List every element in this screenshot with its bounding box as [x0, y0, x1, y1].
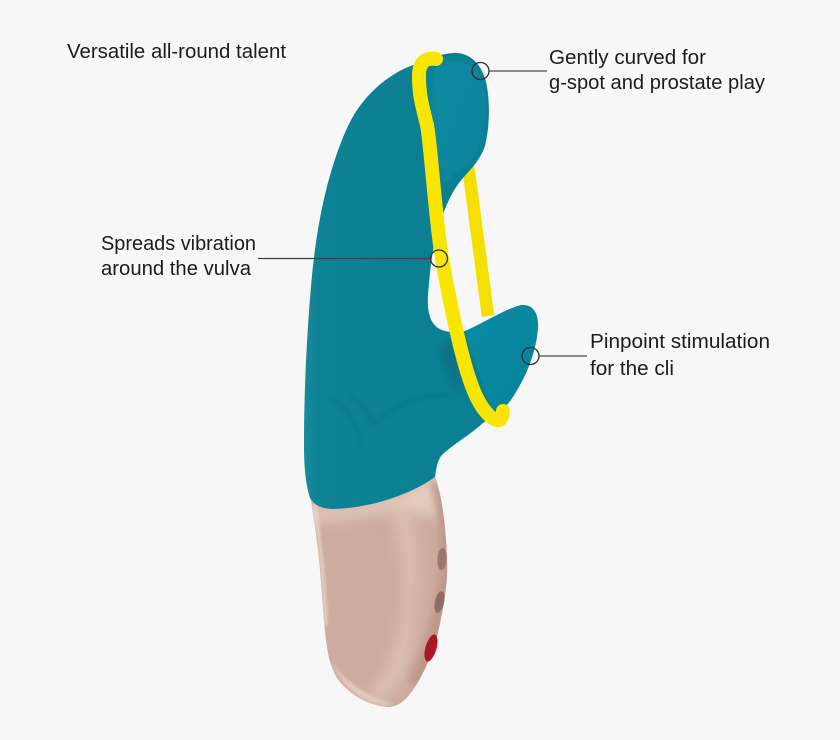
yellow ring front strand [419, 59, 503, 420]
callout: curved tip [472, 47, 765, 94]
handle bottom glow [332, 664, 392, 706]
infographic canvas [67, 43, 769, 707]
button: middle [433, 590, 446, 614]
handle right facet [408, 480, 448, 686]
shading under the arm [442, 344, 462, 388]
back strand of yellow ring [468, 165, 488, 316]
button: upper [437, 548, 447, 570]
callout: curved tip: g-spot and prostate play [549, 72, 765, 94]
teal main body [304, 53, 500, 509]
embossed logo shading [358, 401, 376, 424]
callout: pinpoint stimulation: Pinpoint stimulation [590, 331, 770, 353]
title: Versatile all-round talent [67, 41, 286, 63]
callout: vibration spread: Spreads vibration [101, 233, 256, 255]
handle centre sheen [370, 516, 419, 699]
gold handle [311, 476, 448, 707]
callout: pinpoint stimulation [522, 331, 770, 380]
callout: pinpoint stimulation: for the cli [590, 358, 674, 380]
clitoral arm [465, 305, 538, 412]
callout: vibration spread [101, 233, 448, 280]
handle top sheen [312, 477, 438, 526]
button: power red [422, 633, 440, 663]
callout: curved tip: Gently curved for [549, 47, 706, 69]
handle left highlight [314, 505, 326, 625]
product illustration [300, 53, 538, 707]
tip highlight [432, 61, 486, 190]
callout: vibration spread: around the vulva [101, 258, 252, 280]
